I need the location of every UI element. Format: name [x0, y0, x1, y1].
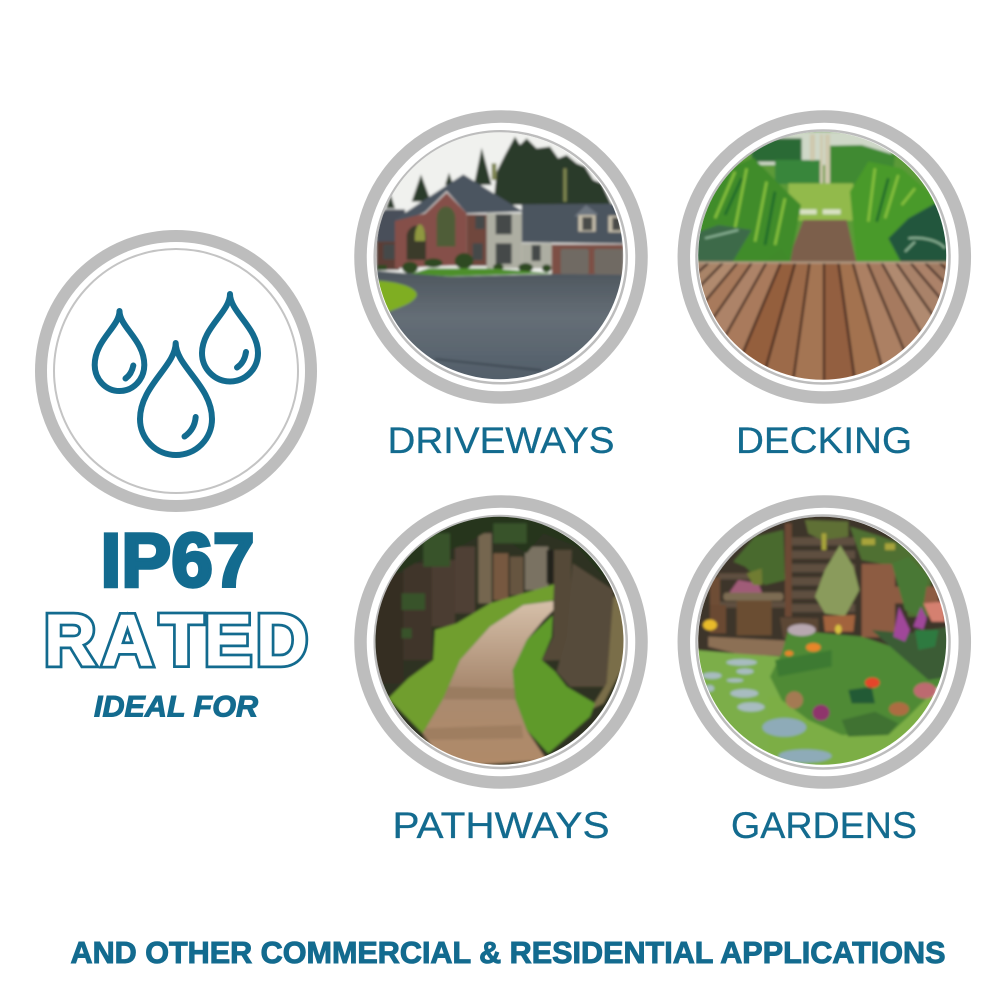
- photo: flower garden: [695, 513, 955, 773]
- panel: water drops badge: [41, 236, 311, 506]
- icon: water drops: [95, 294, 258, 455]
- panel: gardens: [684, 502, 965, 782]
- photo: tree lined path: [370, 513, 630, 773]
- heading: RATED outlined: RATED: [44, 601, 308, 681]
- label: decking: DECKING: [736, 419, 912, 461]
- label: gardens: GARDENS: [731, 804, 917, 846]
- panel: decking: [678, 110, 971, 404]
- heading: IP67: IP67: [100, 518, 254, 604]
- label: pathways: PATHWAYS: [392, 804, 610, 846]
- photo: house and driveway: [370, 128, 630, 388]
- label: driveways: DRIVEWAYS: [388, 419, 614, 461]
- panel: pathways: [360, 502, 642, 782]
- text: ideal for: IDEAL FOR: [94, 691, 259, 724]
- heading: RATED outlined: RATED: [44, 601, 308, 681]
- panel: driveways: [360, 116, 642, 398]
- photo: wooden deck and garden: [698, 132, 946, 380]
- footer text: AND OTHER COMMERCIAL & RESIDENTIAL APPLICATIONS: [70, 935, 946, 970]
